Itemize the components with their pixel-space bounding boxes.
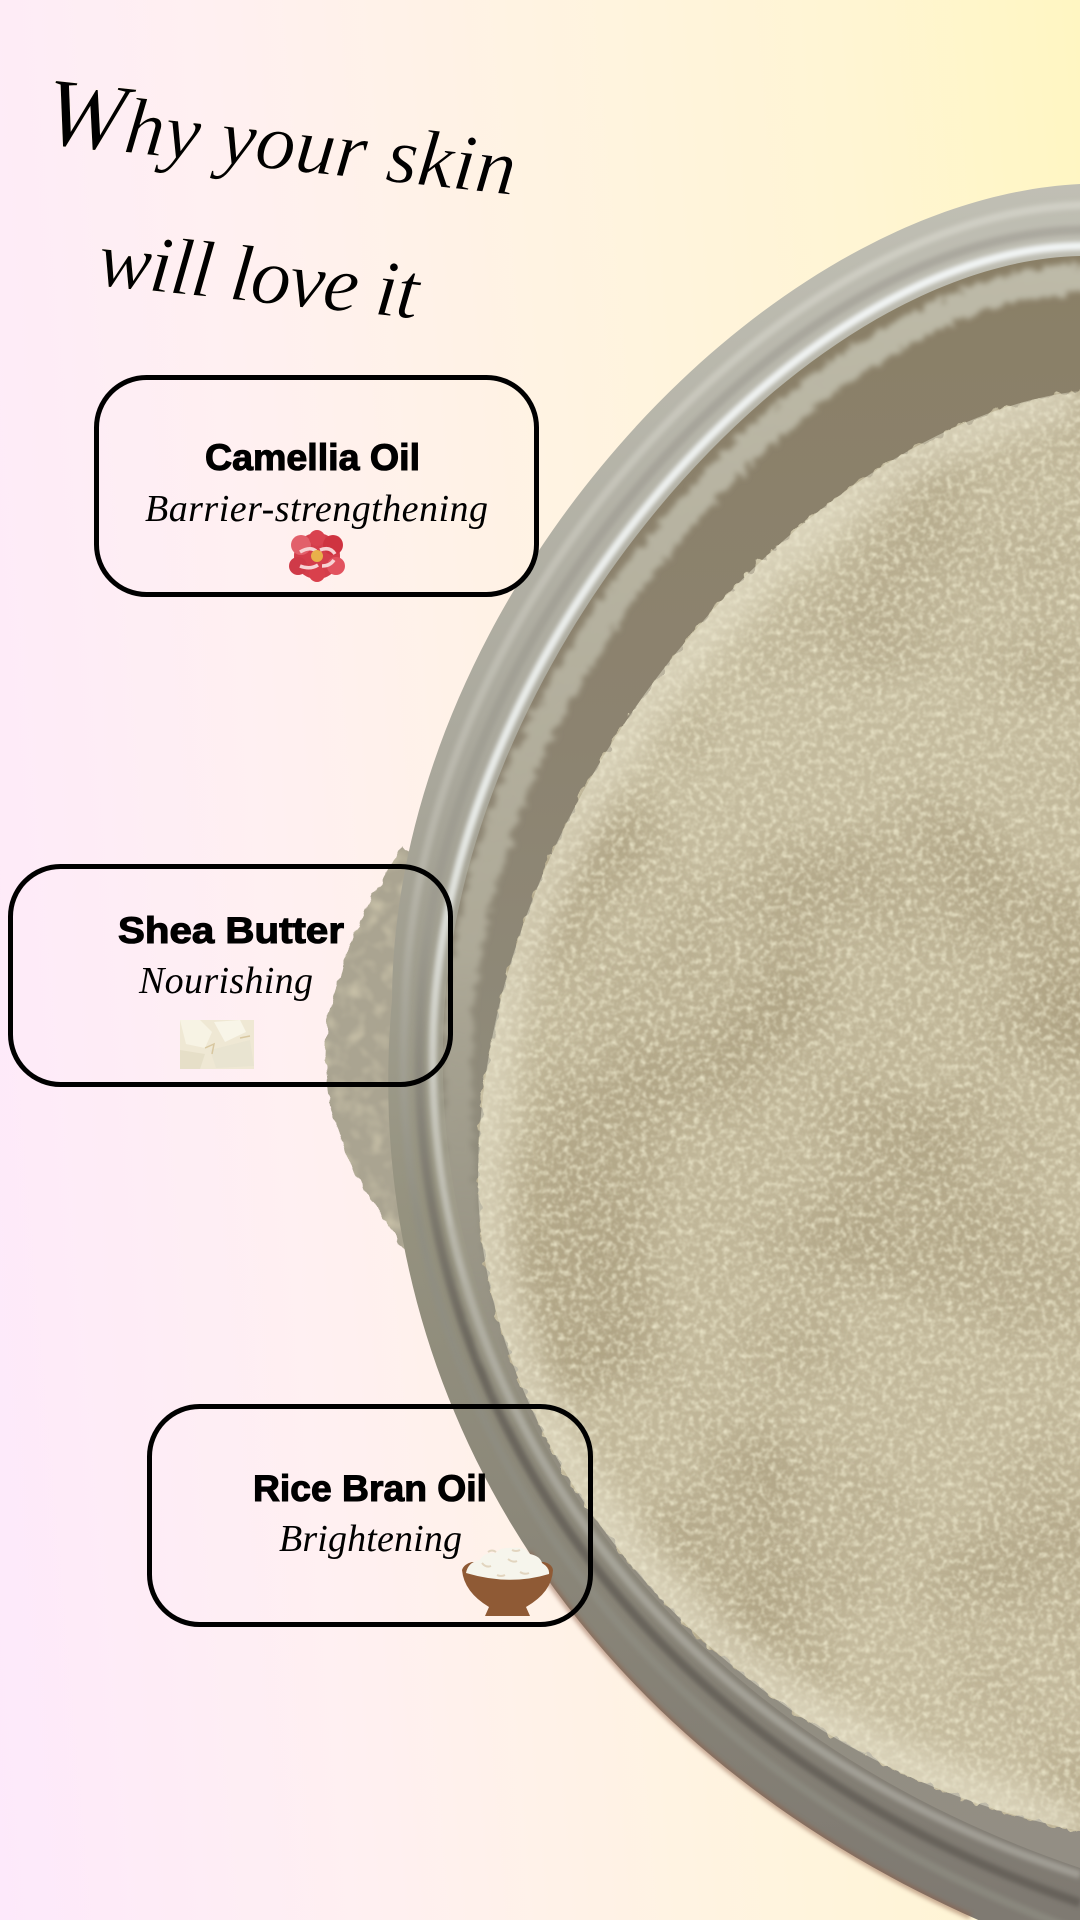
card benefit: Brightening: [279, 1518, 462, 1560]
card: camellia oil: [96, 378, 536, 594]
card: shea butter: [10, 866, 450, 1084]
bright scrub edge: [478, 391, 1080, 1831]
title: Why your skin: [40, 58, 523, 216]
jar rim: [388, 184, 1080, 1920]
card benefit: Nourishing: [138, 960, 313, 1002]
frosted residue on inner wall: [457, 276, 1080, 1420]
icon: rice bowl: [462, 1548, 553, 1616]
card heading: Rice Bran Oil: [253, 1468, 487, 1509]
card heading: Shea Butter: [118, 910, 344, 951]
jar inner wall: [443, 256, 1080, 1880]
card benefit: Barrier-strengthening: [145, 488, 488, 530]
card heading: Camellia Oil: [205, 437, 420, 478]
icon: shea butter flakes: [180, 1020, 254, 1069]
jar of sugar scrub: [325, 184, 1080, 1920]
spilled scrub on jar side: [325, 845, 460, 1300]
title: will love it: [94, 215, 425, 337]
icon: camellia flower: [289, 530, 345, 582]
scrub surface: [478, 385, 1080, 1840]
card: rice bran oil: [150, 1406, 590, 1624]
title: [40, 58, 523, 337]
